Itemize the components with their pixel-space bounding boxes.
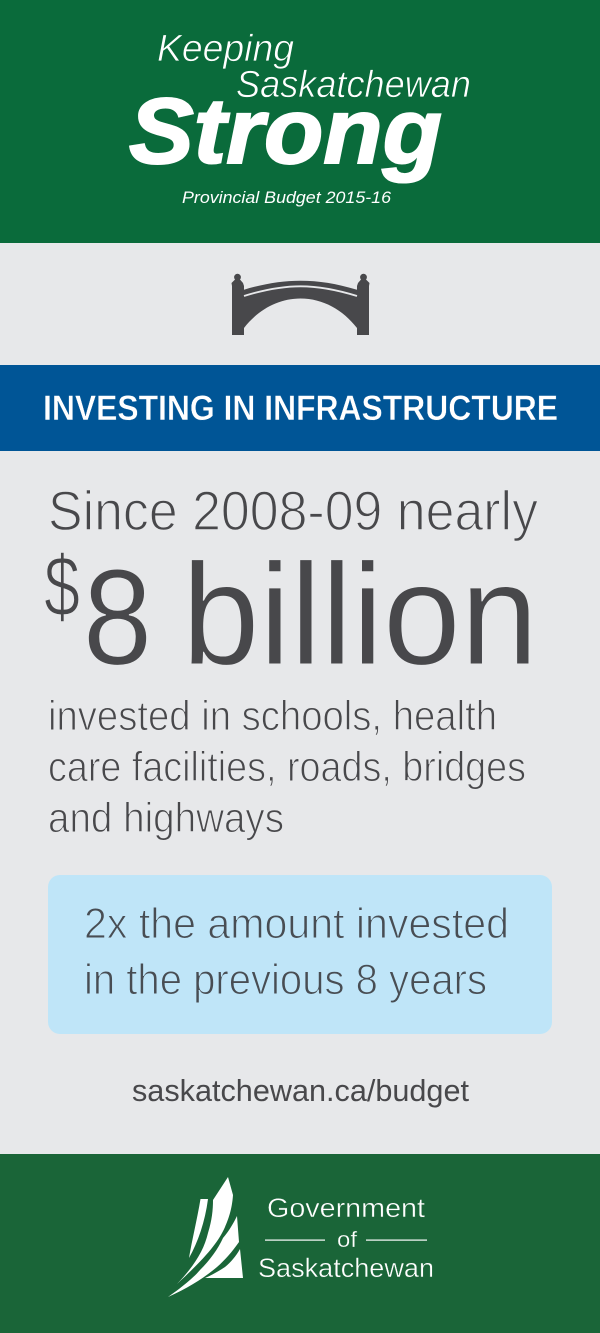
panel: section banner — [0, 365, 600, 451]
billion: billion — [182, 534, 538, 695]
callout: 2x the amount: in the previous 8 years — [84, 956, 487, 1004]
text: since 2008-09 nearly: Since 2008-09 nearly — [48, 479, 538, 542]
heading: Saskatchewan: Saskatchewan — [236, 64, 471, 106]
callout: 2x the amount — [48, 875, 552, 1034]
text: of: of — [337, 1227, 358, 1252]
callout: 2x the amount: 2x the amount invested — [84, 900, 509, 948]
subheading: budget year: Provincial Budget 2015-16 — [182, 188, 392, 207]
text: invested description: care facilities, roads, bridges — [48, 743, 526, 790]
text: Saskatchewan: Saskatchewan — [258, 1253, 434, 1283]
panel: header — [0, 0, 600, 243]
text: invested description: invested in schools, health — [48, 692, 497, 739]
heading: Strong: Strong — [129, 79, 442, 183]
text: Government: Government — [267, 1193, 426, 1223]
big number: 8 billion — [44, 534, 538, 695]
panel: footer — [0, 1154, 600, 1333]
heading: investing in infrastructure: INVESTING IN INFRASTRUCTURE — [43, 389, 558, 428]
text: website url: saskatchewan.ca/budget — [132, 1073, 469, 1108]
heading: Keeping: Keeping — [157, 28, 294, 70]
text: invested description — [48, 692, 526, 841]
icon: government wheat logo — [168, 1177, 243, 1297]
eight: 8 — [83, 541, 152, 693]
dollar sign: $ — [44, 539, 80, 635]
text: invested description: and highways — [48, 794, 284, 841]
icon: bridge — [232, 274, 370, 335]
